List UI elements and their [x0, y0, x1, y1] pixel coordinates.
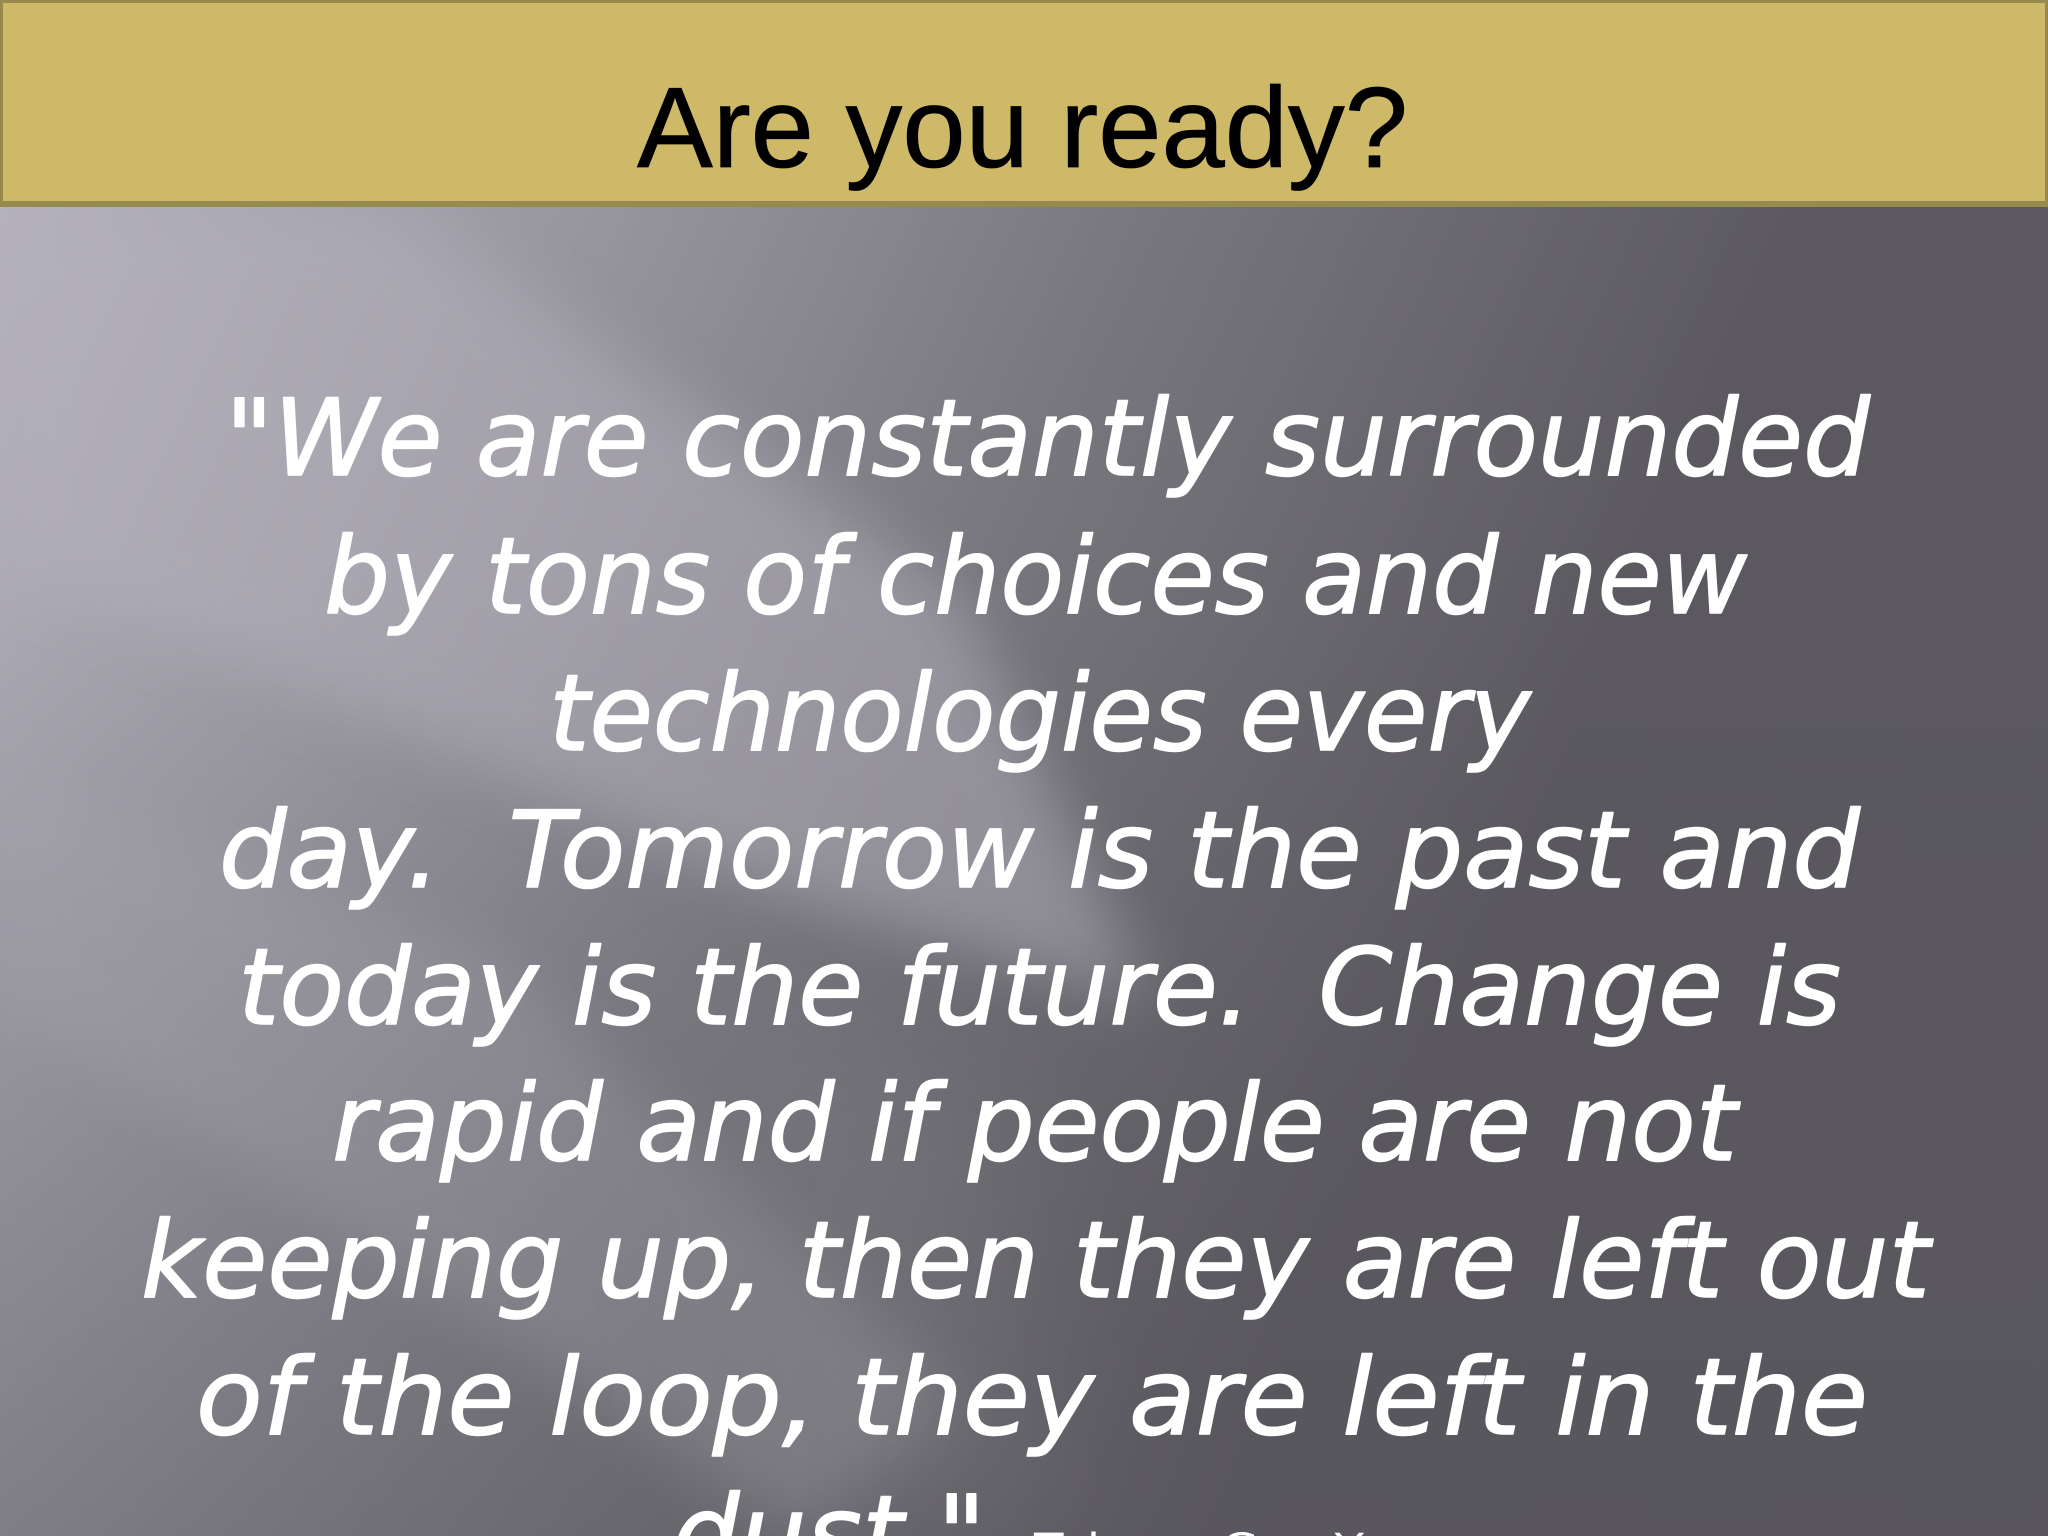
quote line 7: keeping up, then they are left out [141, 1199, 1933, 1322]
quote line 5: today is the future. Change is [238, 926, 1841, 1049]
quote line 1: "We are constantly surrounded [225, 377, 1871, 500]
quote line 6: rapid and if people are not [332, 1062, 1740, 1185]
quote line 4: day. Tomorrow is the past and [219, 789, 1861, 912]
title: Are you ready? [637, 65, 1408, 192]
quote line 8: of the loop, they are left in the [196, 1336, 1868, 1459]
quote line 3: technologies every [549, 652, 1532, 775]
title banner [0, 2, 2048, 207]
quote text [141, 377, 1933, 1536]
quote line 2: by tons of choices and new [324, 515, 1747, 638]
